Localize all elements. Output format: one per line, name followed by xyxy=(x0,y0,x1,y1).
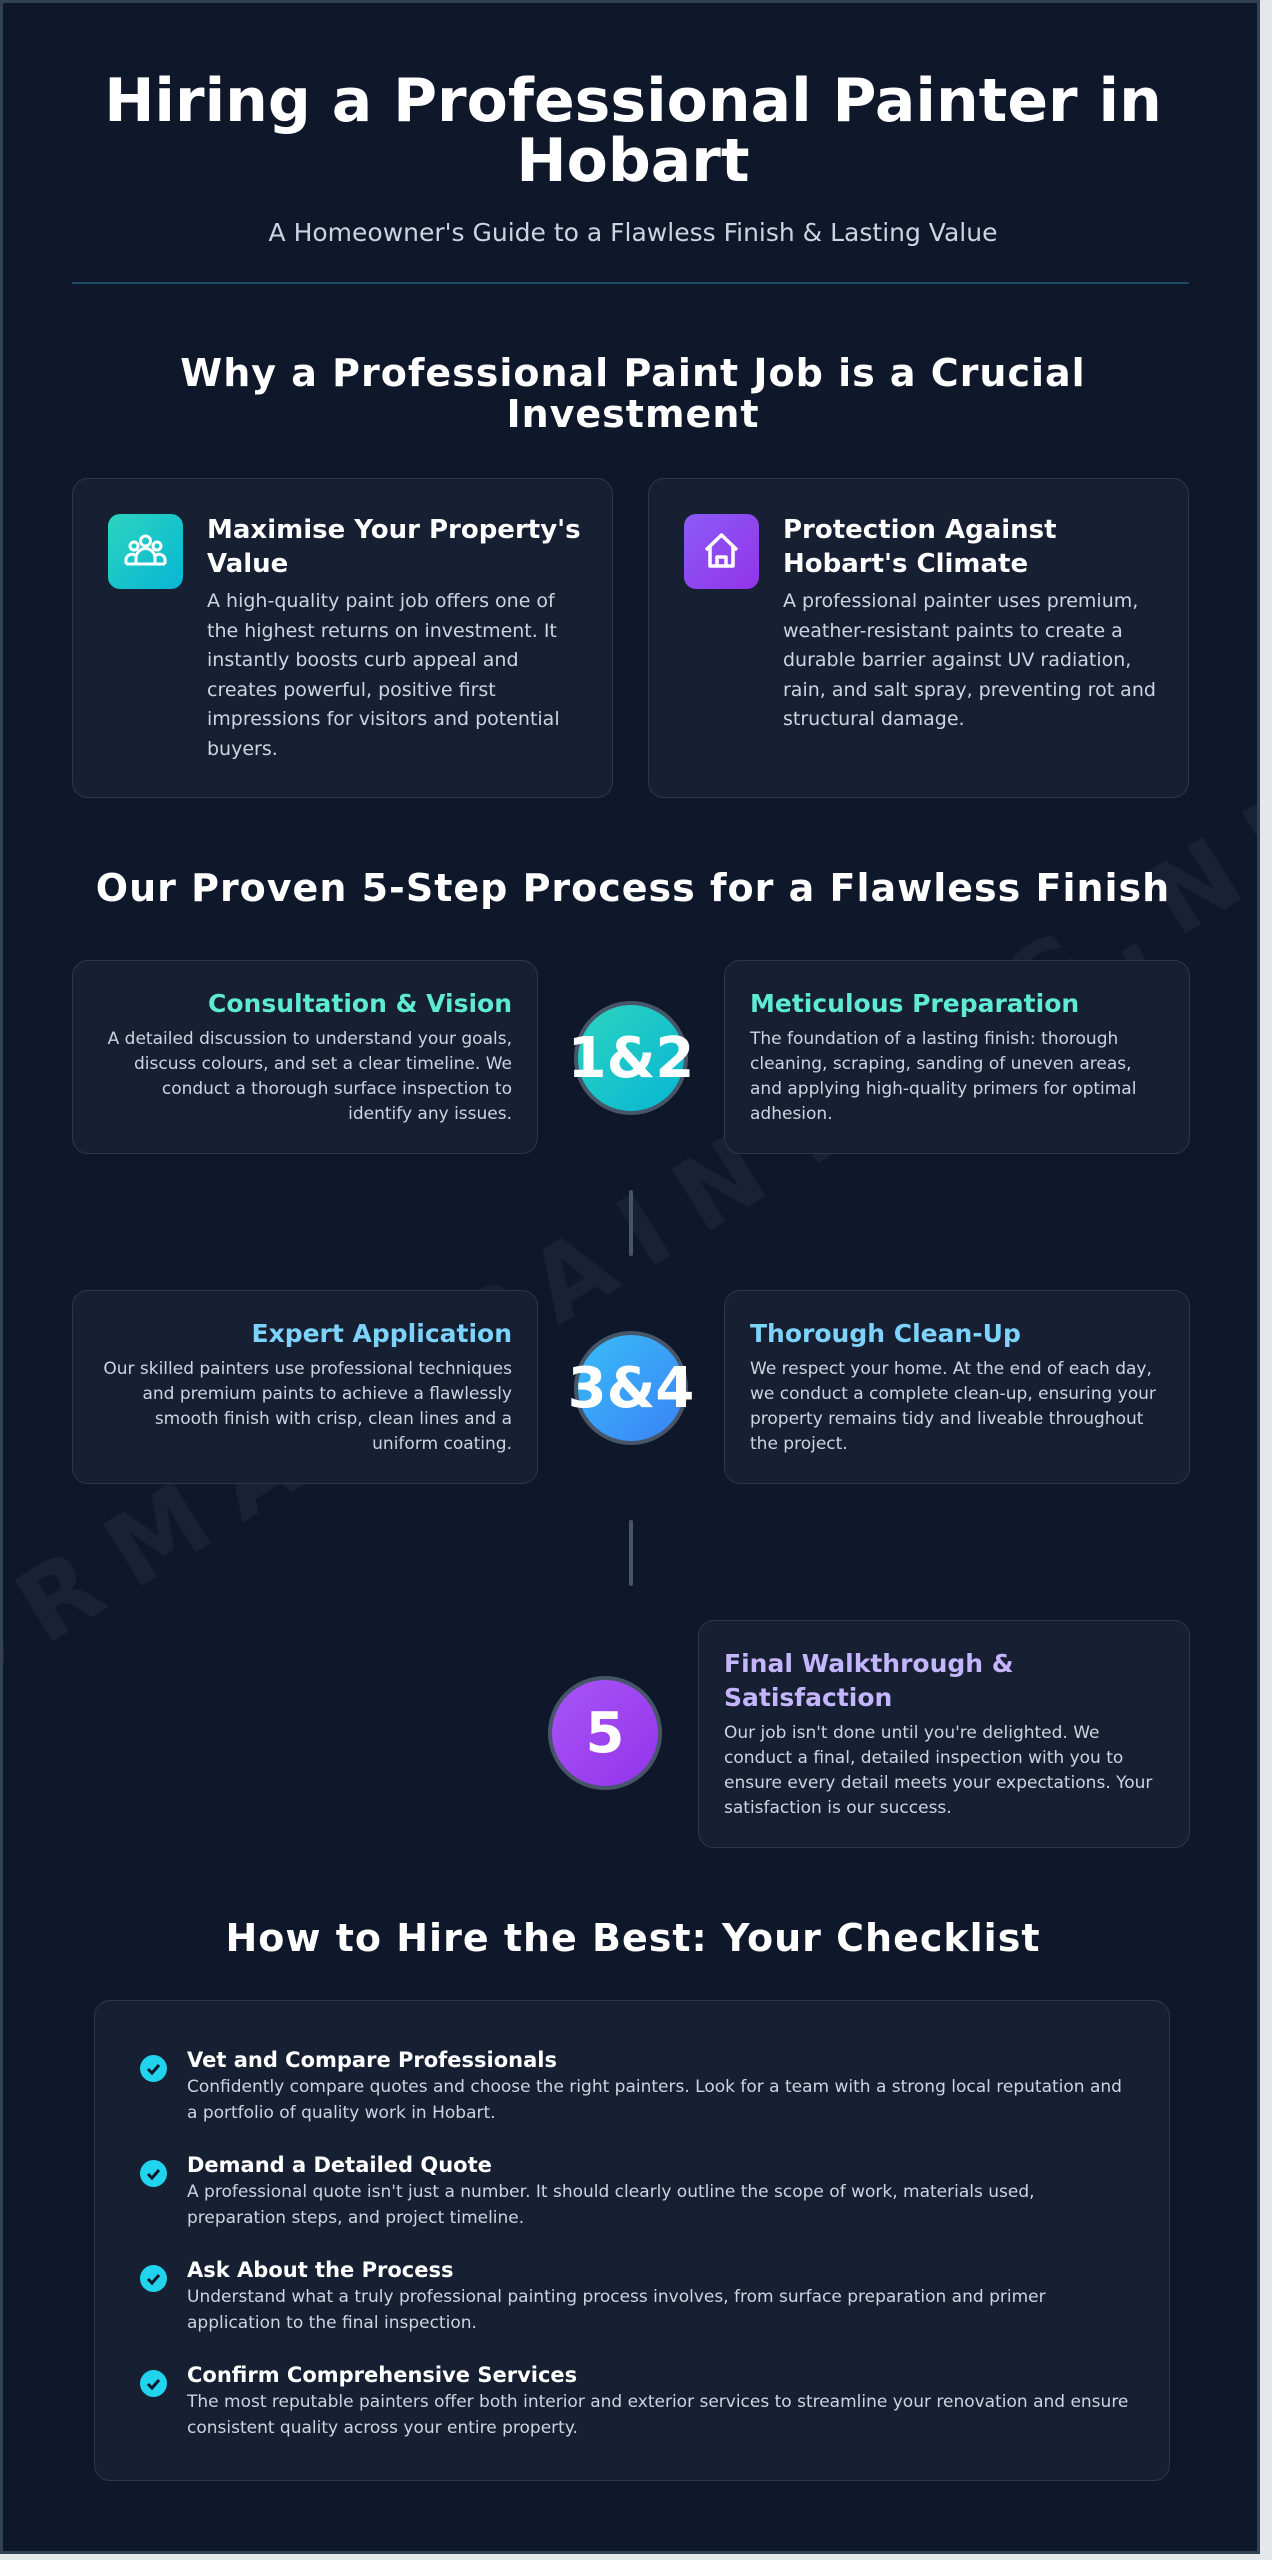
heading: why: Why a Professional Paint Job is a Crucial xyxy=(180,351,1086,395)
step circle 3&4: 3&4 xyxy=(568,1356,694,1420)
item 2: Demand a Detailed Quote xyxy=(187,2153,492,2177)
item 1 xyxy=(140,2048,1122,2123)
heading: checklist: How to Hire the Best: Your Checklist xyxy=(226,1916,1040,1960)
panel: property value xyxy=(72,478,613,798)
connector xyxy=(629,1520,633,1586)
step 2 card xyxy=(724,960,1190,1154)
item 3: Ask About the Process xyxy=(187,2258,453,2282)
step 3 card: Our skilled painters use professional techniques and premium paints to achieve a flawlessly smooth finish with crisp, clean lines and a uniform coating. xyxy=(103,1359,512,1454)
heading: process: Our Proven 5-Step Process for a Flawless Finish xyxy=(96,866,1170,910)
step 5 card xyxy=(698,1620,1190,1848)
heading: why: Investment xyxy=(506,392,760,436)
heading: why xyxy=(180,351,1086,436)
item 4: Confirm Comprehensive Services xyxy=(187,2363,577,2387)
item 2 xyxy=(140,2153,1035,2228)
item 4: The most reputable painters offer both interior and exterior services to streamline your renovation and ensure consistent quality across your entire property. xyxy=(187,2392,1128,2438)
icon: house xyxy=(684,514,759,589)
step 4 card: Thorough Clean-Up xyxy=(750,1319,1021,1348)
title: Hobart xyxy=(516,126,750,196)
step 4 card xyxy=(724,1290,1190,1484)
panel: checklist xyxy=(94,2000,1170,2481)
step circle 5 xyxy=(548,1676,662,1790)
step 1 card: A detailed discussion to understand your goals, discuss colours, and set a clear timeline. We conduct a thorough surface inspection to identify any issues. xyxy=(108,1029,512,1124)
item 3: Understand what a truly professional painting process involves, from surface preparation and primer application to the final inspection. xyxy=(187,2287,1046,2333)
step 4 card: We respect your home. At the end of each day, we conduct a complete clean-up, ensuring your property remains tidy and liveable throughout the project. xyxy=(750,1359,1156,1454)
text: Protection Against Hobart's Climate xyxy=(783,515,1057,579)
step circle 5: 5 xyxy=(586,1700,624,1766)
step 1 card: Consultation & Vision xyxy=(208,989,512,1018)
title: Hiring a Professional Painter in xyxy=(104,66,1162,136)
text: Maximise Your Property's Value xyxy=(207,515,581,579)
step 5 card: Our job isn't done until you're delighted. We conduct a final, detailed inspection with you to ensure every detail meets your expectations. Your satisfaction is our success. xyxy=(724,1723,1152,1818)
panel: climate xyxy=(648,478,1189,798)
item 4 xyxy=(140,2363,1128,2438)
step 2 card: Meticulous Preparation xyxy=(750,989,1079,1018)
text xyxy=(783,515,1156,730)
item 1: Confidently compare quotes and choose the right painters. Look for a team with a strong local reputation and a portfolio of quality work in Hobart. xyxy=(187,2077,1122,2123)
subtitle: A Homeowner's Guide to a Flawless Finish & Lasting Value xyxy=(269,218,997,247)
item 3 xyxy=(140,2258,1046,2333)
item 2: A professional quote isn't just a number. It should clearly outline the scope of work, materials used, preparation steps, and project timeline. xyxy=(187,2182,1035,2228)
text: A professional painter uses premium, weather-resistant paints to create a durable barrier against UV radiation, rain, and salt spray, preventing rot and structural damage. xyxy=(783,590,1156,730)
step 3 card xyxy=(72,1290,538,1484)
item 1: Vet and Compare Professionals xyxy=(187,2048,557,2072)
step circle 1&2: 1&2 xyxy=(568,1026,694,1090)
step 5 card: Final Walkthrough & Satisfaction xyxy=(724,1649,1014,1712)
step 1 card xyxy=(72,960,538,1154)
text: A high-quality paint job offers one of the highest returns on investment. It instantly boosts curb appeal and creates powerful, positive first impressions for visitors and potential buyers. xyxy=(207,590,560,760)
icon: people xyxy=(108,514,183,589)
step circle 1&2 xyxy=(574,1001,688,1115)
title xyxy=(104,66,1162,196)
text xyxy=(207,515,581,760)
connector xyxy=(629,1190,633,1256)
step 2 card: The foundation of a lasting finish: thorough cleaning, scraping, sanding of uneven areas, and applying high-quality primers for optimal adhesion. xyxy=(750,1029,1136,1124)
step circle 3&4 xyxy=(574,1331,688,1445)
step 3 card: Expert Application xyxy=(252,1319,512,1348)
